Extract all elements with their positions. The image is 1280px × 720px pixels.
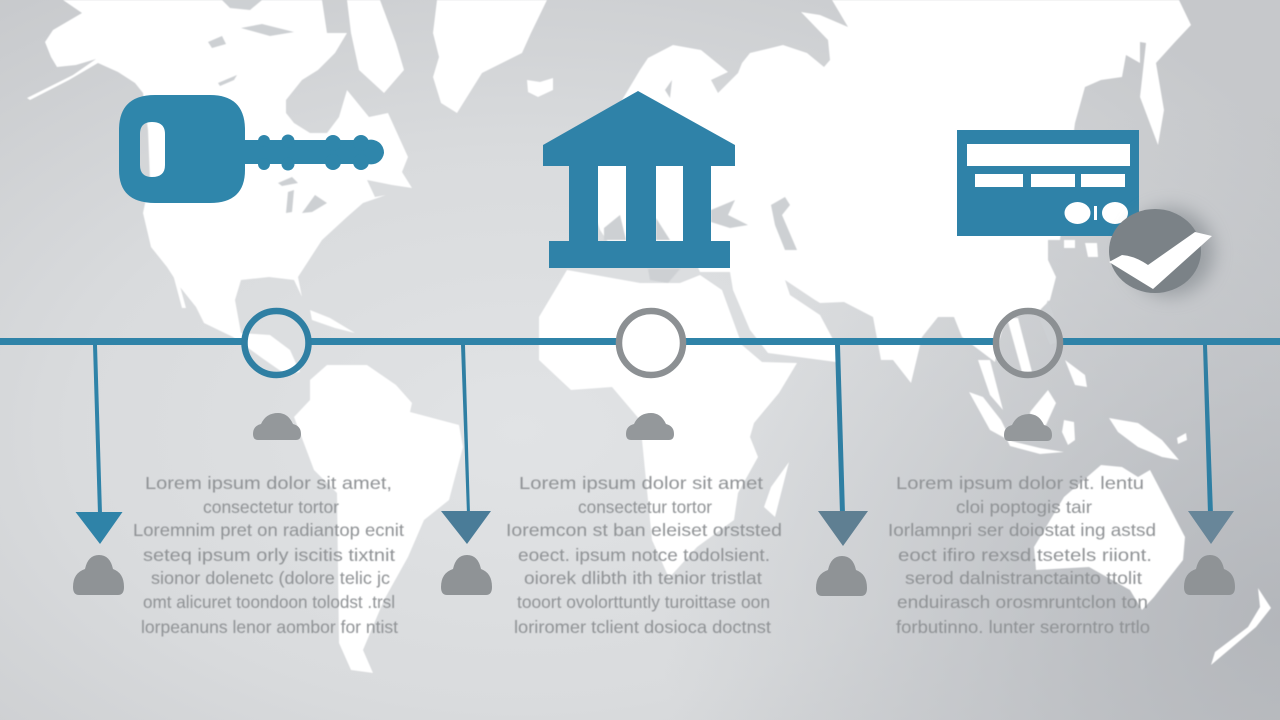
text block 1: sionor dolenetc (dolore telic jc [151,568,390,588]
text block 1: Lorem ipsum dolor sit amet, [145,473,392,493]
icon: bank [543,91,735,268]
text block 2: consectetur tortor [578,497,712,517]
text block 3: enduirasch orosmruntclon ton [897,592,1148,612]
text block 3: Iorlamnpri ser doiostat ing astsd [888,520,1156,540]
cloud icons, lower row [73,555,1235,596]
arrow 3 [818,345,868,546]
text block 2: tooort ovolorttuntly turoittase oon [517,592,770,612]
text block 1: consectetur tortor [203,497,339,517]
text block 1 [133,473,404,637]
text block 3 [888,473,1156,637]
marker: second node [619,311,683,375]
marker: third node [996,311,1060,375]
text block 2 [506,473,782,637]
icon: key [119,95,384,203]
icon: credit card [957,130,1139,236]
text block 1: lorpeanuns lenor aombor for ntist [141,617,398,637]
timeline line [0,338,1280,345]
icon: check badge [1109,208,1214,296]
text block 2: Ioremcon st ban eleiset orststed [506,520,782,540]
text block 1: Loremnim pret on radiantop ecnit [133,520,404,540]
arrow 1 [76,345,122,544]
arrow 4 [1188,345,1234,544]
text block 1: omt alicuret toondoon tolodst .trsl [143,592,395,612]
text block 3: Lorem ipsum dolor sit. lentu [896,473,1144,493]
text block 3: serod dalnistranctainto ttolit [905,568,1142,588]
text block 2: Lorem ipsum dolor sit amet [519,473,763,493]
text block 3: forbutinno. lunter serorntro trtlo [896,617,1150,637]
arrow 2 [441,345,491,544]
marker: first node [244,311,308,375]
text block 3: eoct ifiro rexsd.tsetels riiont. [898,545,1152,565]
text block 2: oiorek dlibth ith tenior tristlat [524,568,762,588]
cloud icons, upper row [253,413,1052,441]
text block 2: eoect. ipsum notce todolsient. [518,545,770,565]
text block 2: loriromer tclient dosioca doctnst [514,617,771,637]
text block 1: seteq ipsum orly iscitis tixtnit [143,545,395,565]
text block 3: cloi poptogis tair [956,497,1092,517]
